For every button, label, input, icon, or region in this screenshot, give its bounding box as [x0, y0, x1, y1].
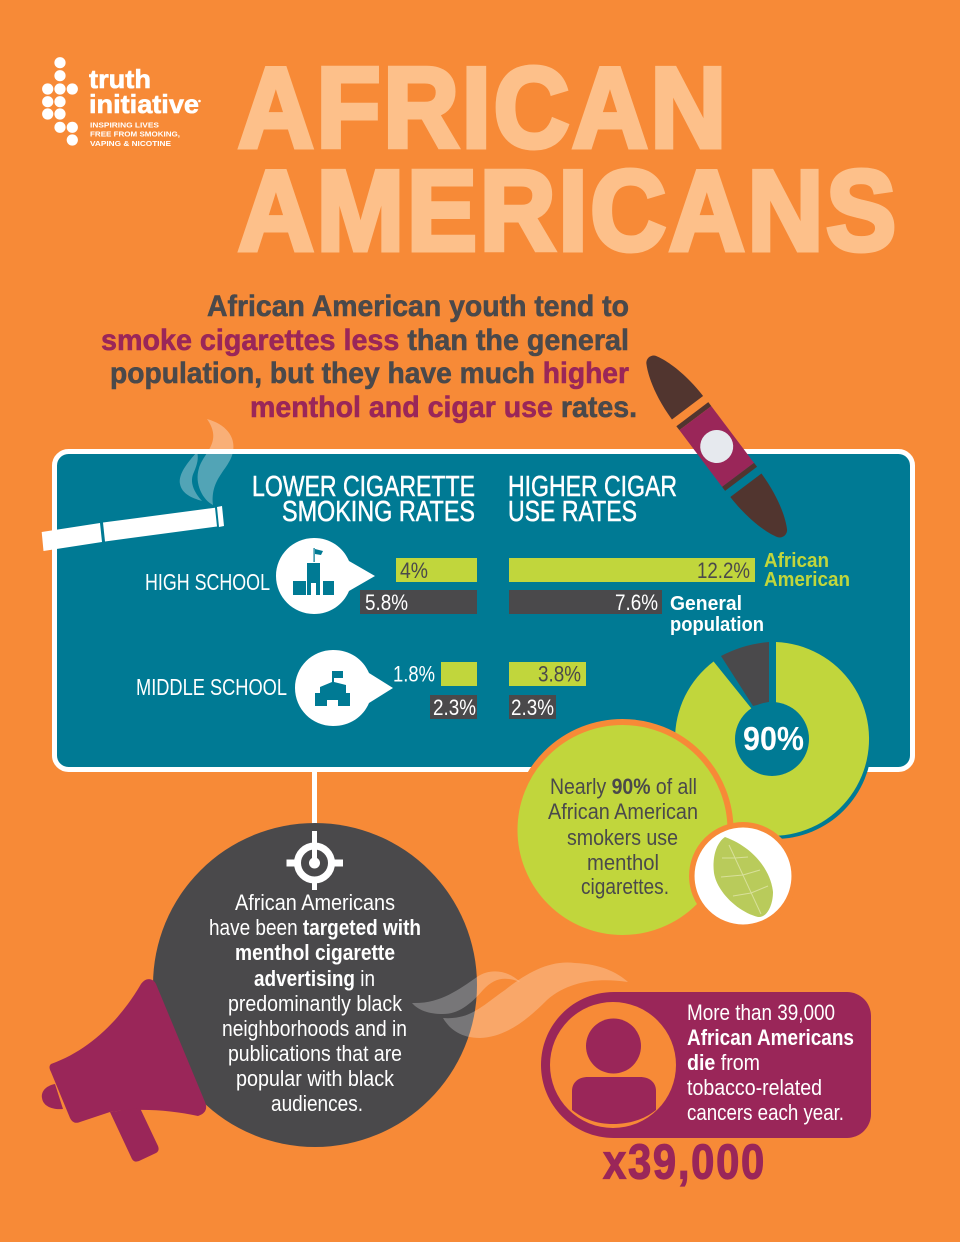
bar chart: lower cigarette smoking rates: 5.8% — [365, 590, 408, 615]
bar chart: lower cigarette smoking rates: 4% — [400, 558, 428, 583]
legend: african american: African — [764, 550, 829, 572]
panel: deaths callout: African Americans — [687, 1025, 854, 1050]
donut chart: 90% menthol: 90% — [743, 720, 804, 757]
heading: lower cigarette smoking rates — [252, 471, 475, 528]
icon: mint leaf — [692, 825, 794, 927]
bar chart: lower cigarette smoking rates — [360, 558, 477, 720]
bar chart: higher cigar use rates — [509, 558, 755, 720]
title: AFRICAN — [238, 45, 729, 172]
icon: megaphone — [42, 979, 206, 1162]
intro text block: African American youth tend to — [207, 290, 629, 323]
panel: targeted advertising circle: predominantly black — [228, 991, 403, 1016]
panel: smoking rates — [54, 452, 912, 770]
bar chart: higher cigar use rates: 12.2% — [697, 558, 750, 583]
panel: targeted advertising circle: advertising in — [254, 966, 375, 991]
donut chart: 90% menthol — [675, 642, 872, 839]
callout: menthol circle: smokers use — [567, 825, 678, 850]
icon: person — [550, 1002, 676, 1128]
panel: deaths callout — [541, 992, 871, 1138]
intro text block: population, but they have much higher — [110, 357, 629, 390]
heading: lower cigarette smoking rates: LOWER CIGARETTE — [252, 471, 475, 503]
logo tagline: FREE FROM SMOKING, — [90, 130, 180, 138]
icon: high school speech bubble — [276, 538, 375, 614]
icon: dotted cross — [42, 57, 78, 146]
panel: targeted advertising circle: African Americans — [235, 890, 395, 915]
connector line — [312, 771, 317, 831]
panel: targeted advertising circle: publications that are — [228, 1041, 402, 1066]
callout: menthol circle: Nearly 90% of all — [550, 774, 697, 799]
intro text block: smoke cigarettes less than the general — [101, 324, 629, 357]
bar chart: higher cigar use rates: 2.3% — [511, 695, 554, 720]
bar chart: lower cigarette smoking rates: 1.8% — [393, 662, 435, 686]
logo wordmark — [89, 64, 200, 119]
panel: targeted advertising circle: menthol cigarette — [235, 940, 395, 965]
logo tagline: VAPING & NICOTINE — [90, 139, 171, 148]
panel: targeted advertising circle: neighborhoods and in — [222, 1016, 407, 1041]
multiplier: x39,000: x39,000 — [603, 1136, 766, 1190]
title — [238, 45, 899, 275]
logo wordmark: truth — [89, 64, 151, 94]
intro text block: menthol and cigar use rates. — [250, 391, 637, 424]
heading: lower cigarette smoking rates: SMOKING RATES — [282, 496, 475, 528]
panel: targeted advertising circle: have been targeted with — [209, 915, 421, 940]
bar chart: higher cigar use rates: 3.8% — [538, 662, 581, 686]
title: AMERICANS — [238, 148, 899, 275]
panel: targeted advertising circle: popular with black — [236, 1066, 395, 1091]
callout: menthol circle: cigarettes. — [581, 874, 669, 899]
callout: menthol circle: African American — [548, 799, 698, 824]
panel: deaths callout: cancers each year. — [687, 1100, 844, 1125]
legend: general population — [670, 593, 764, 636]
panel: targeted advertising circle: audiences. — [271, 1091, 363, 1116]
heading: higher cigar use rates: USE RATES — [508, 496, 637, 528]
panel: deaths callout: More than 39,000 — [687, 1000, 835, 1025]
bar chart: higher cigar use rates: 7.6% — [615, 590, 658, 615]
label: high school: HIGH SCHOOL — [145, 569, 270, 595]
legend: african american — [764, 550, 850, 591]
heading: higher cigar use rates — [508, 471, 677, 528]
icon: target crosshair — [286, 831, 343, 890]
panel: deaths callout: tobacco-related — [687, 1075, 822, 1100]
logo tagline — [90, 120, 180, 148]
label: middle school: MIDDLE SCHOOL — [136, 674, 287, 700]
logo wordmark: initiative — [89, 89, 199, 119]
intro text block — [101, 290, 637, 424]
logo: truth initiative — [42, 57, 200, 148]
panel: targeted advertising circle — [153, 823, 477, 1147]
legend: general population: population — [670, 614, 764, 636]
legend: african american: American — [764, 569, 850, 591]
icon: cigarette smoke — [180, 419, 233, 505]
logo tagline: INSPIRING LIVES — [90, 120, 159, 130]
icon: cigar — [633, 345, 800, 548]
heading: higher cigar use rates: HIGHER CIGAR — [508, 471, 677, 503]
callout: menthol circle: menthol — [587, 850, 659, 875]
panel: deaths callout: die from — [687, 1050, 760, 1075]
bar chart: lower cigarette smoking rates: 2.3% — [433, 695, 476, 720]
icon: smoke swirl — [412, 963, 628, 1038]
legend: general population: General — [670, 593, 742, 615]
icon: middle school speech bubble — [295, 650, 393, 726]
callout: menthol circle — [514, 722, 730, 938]
icon: cigarette — [42, 506, 224, 551]
